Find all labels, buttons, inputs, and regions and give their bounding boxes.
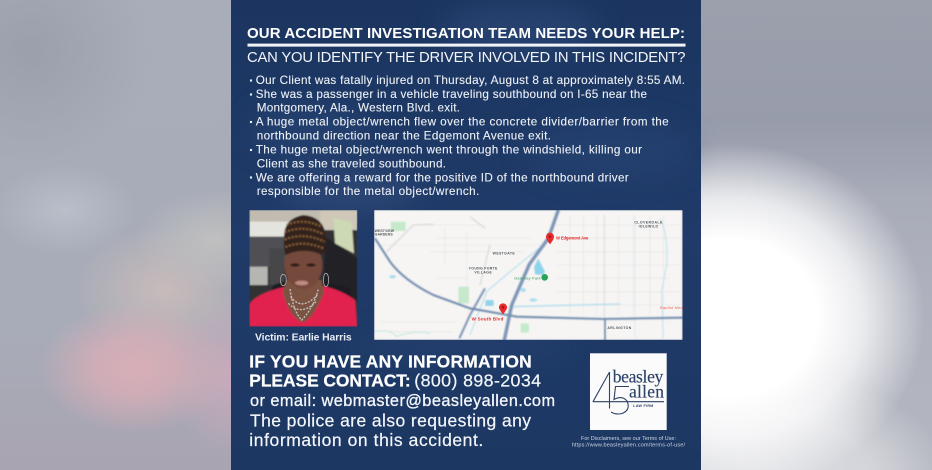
map: incident location: VILLAGE [474,270,492,274]
logo: Beasley Allen: allen [629,382,664,402]
map: incident location: Baptist Med [660,305,683,310]
text block: incident bullet list: responsible for the metal object/wrench. [257,185,479,198]
text block: incident bullet list: Our Client was fatally injured on Thursday, August 8 at approximately 8:55 AM. [256,74,685,87]
map: incident location: WESTVIEW [375,229,395,233]
text block: incident bullet list: She was a passenger in a vehicle traveling southbound on I-65 near the [256,88,647,101]
disclaimer: https://www.beasleyallen.com/terms-of-use/ [572,442,685,448]
map: incident location: W South Blvd [472,317,504,322]
text block: incident bullet list: northbound direction near the Edgemont Avenue exit. [257,129,551,142]
contact heading: IF YOU HAVE ANY INFORMATION [249,352,532,372]
map: incident location: CLOVERDALE [634,221,663,225]
contact phone number: (800) 898-2034 [414,371,541,391]
map: incident location [374,210,683,340]
map: incident location: GARDENS [375,233,393,237]
police request text: information on this accident. [249,430,483,450]
map: incident location: ARLINGTON [607,326,632,330]
pin: Edgemont [546,233,554,244]
logo: Beasley Allen: beasley [613,367,664,387]
logo: Beasley Allen: LAW FIRM [633,404,653,408]
pin: South Blvd [499,303,507,314]
text block: incident bullet list [250,74,685,198]
map: incident location: WESTGATE [493,252,515,256]
text block: incident bullet list: The huge metal object/wrench went through the windshield, killing our [256,143,642,156]
police request text [249,411,531,450]
logo: Beasley Allen [590,353,667,430]
text block: incident bullet list: A huge metal object/wrench flew over the concrete divider/barrier from the [256,116,669,129]
panel: navy poster background [231,0,701,470]
disclaimer: For Disclaimers, see our Terms of Use: [581,436,676,442]
disclaimer [572,436,685,448]
contact heading: PLEASE CONTACT: [249,371,411,391]
text block: incident bullet list: Client as she traveled southbound. [257,157,446,170]
left blurred background [0,0,232,470]
map: incident location: YOUNG FORTE [469,266,498,270]
photo caption: Victim: Earlie Harris [255,333,352,344]
title: OUR ACCIDENT INVESTIGATION TEAM NEEDS YOUR HELP: [247,25,685,42]
map: incident location: IDLEWILD [639,224,658,228]
contact email: or email: webmaster@beasleyallen.com [250,392,555,410]
photo: victim portrait [249,210,357,327]
text block: incident bullet list: Montgomery, Ala., Western Blvd. exit. [257,102,460,115]
park marker [541,274,548,281]
subtitle: CAN YOU IDENTIFY THE DRIVER INVOLVED IN THIS INCIDENT? [247,50,686,66]
right blurred background [700,0,932,470]
text block: incident bullet list: We are offering a reward for the positive ID of the northbound driver [256,171,629,184]
map: incident location: W Edgemont Ave [556,235,589,240]
contact heading [249,352,532,391]
police request text: The police are also requesting any [250,411,531,431]
map: incident location: Gateway Park [514,275,541,280]
